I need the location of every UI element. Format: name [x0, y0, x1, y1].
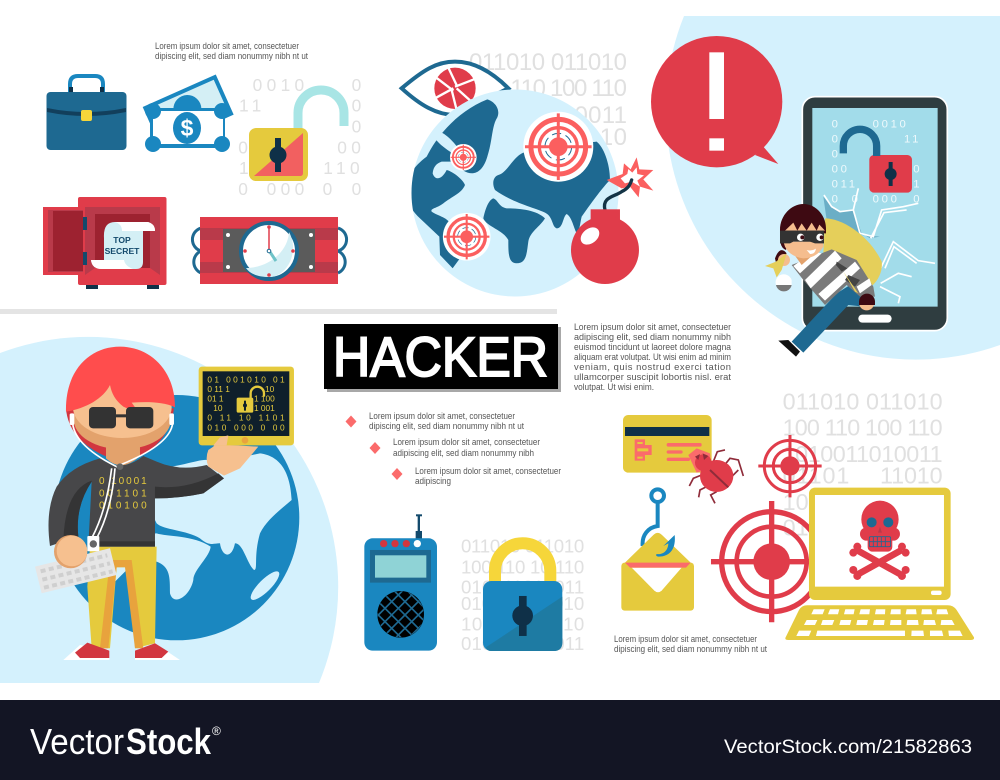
text block: paragraph: volutpat. Ut wisi enim. — [574, 381, 654, 392]
hoodie binary text: 010100 — [99, 500, 147, 511]
binary digits behind blue padlock: 100 110 10 110 — [461, 556, 584, 577]
binary digits behind open padlock: 0 — [352, 96, 366, 116]
text block: paragraph: veniam, quis nostrud exerci tation — [574, 361, 731, 372]
icon: alert speech bubble — [651, 36, 782, 167]
icon: cracked smartphone: 011 — [832, 178, 858, 190]
icon: large target — [523, 112, 593, 182]
icon: cracked smartphone: 0 — [832, 119, 841, 131]
text block: bottom right caption: dipiscing elit, sed diam nonummy nibh nt ut — [614, 643, 767, 654]
footer logo: ® — [212, 724, 221, 738]
binary digits behind open padlock: 0 — [238, 179, 252, 199]
bullet 3: Lorem ipsum dolor sit amet, consectetuer — [415, 465, 561, 476]
bullet 2 — [370, 436, 540, 458]
icon: cracked smartphone: 0 — [913, 163, 922, 175]
icon: large crosshair target — [711, 501, 833, 622]
icon: small crosshair target — [758, 435, 822, 497]
icon: small target — [450, 144, 477, 171]
tablet: 010 000 0 00 — [207, 422, 285, 432]
tablet: 0 11 1 — [207, 384, 230, 394]
binary digits behind open padlock: 1 — [239, 158, 253, 178]
tablet: 0 11 10 1101 — [207, 413, 285, 423]
icon: cracked smartphone — [802, 97, 947, 331]
icon: bug — [688, 448, 743, 503]
hoodie — [48, 456, 224, 547]
icon: cracked smartphone: 0 — [913, 193, 922, 205]
title: HACKER: HACKER — [333, 325, 548, 388]
head — [66, 347, 175, 465]
icon: eye with shutter — [402, 62, 508, 115]
icon: briefcase — [46, 76, 126, 150]
text block: paragraph — [574, 321, 732, 392]
tablet: 10 — [265, 384, 275, 394]
text block: paragraph: ullamcorper suscipit lobortis nisl. erat — [574, 371, 731, 382]
figure: thief with loot bag — [765, 204, 882, 357]
tablet: 1 100 — [254, 394, 275, 404]
icon: cracked smartphone: 00 — [832, 163, 850, 175]
binary digits behind blue padlock: 010011010011 — [461, 633, 584, 654]
hand with keyboard — [54, 535, 87, 568]
footer bar — [0, 700, 1000, 780]
tablet: 01 001010 01 — [207, 375, 285, 385]
icon: cracked smartphone: 0 — [832, 193, 841, 205]
tablet: 01 1 — [207, 394, 224, 404]
icon: laptop with skull — [785, 488, 974, 640]
binary digits top centre: 10010011 — [520, 102, 627, 129]
binary digits top centre: 100 — [570, 147, 610, 174]
tablet — [199, 367, 294, 445]
binary digits bottom right: 01101 — [783, 462, 849, 488]
binary digits bottom right: 100 — [783, 489, 822, 515]
icon: cracked smartphone: 0 — [832, 133, 841, 145]
text block: paragraph: adipiscing elit, sed diam nonummy nibh — [574, 331, 731, 342]
land: americas — [406, 99, 498, 268]
globe — [54, 395, 299, 640]
binary digits behind open padlock: 0 — [352, 116, 366, 136]
music player — [87, 536, 99, 551]
binary digits bottom right: 1010011010011 — [783, 441, 943, 467]
binary digits behind open padlock — [238, 75, 366, 199]
bullet 1 — [346, 410, 524, 431]
binary digits behind open padlock: 0 — [323, 179, 337, 199]
binary digits behind open padlock: 0 — [352, 179, 366, 199]
globe with targets — [406, 90, 618, 296]
icon: open padlock — [249, 90, 344, 181]
bullet 2: adipiscing elit, sed diam nonummy nibh — [393, 447, 534, 458]
binary digits behind blue padlock: 011010 011010 — [461, 535, 584, 556]
binary digits top centre: 011010 011010 — [469, 49, 627, 76]
hoodie binary text: 001101 — [99, 488, 147, 499]
panel: bottom left light blue circle — [0, 337, 338, 683]
binary digits behind blue padlock: 100 110 10 10 — [461, 614, 584, 635]
binary digits behind blue padlock: 010011010011 — [461, 576, 584, 597]
icon: cracked smartphone: 0 — [832, 148, 841, 160]
bullet 2: Lorem ipsum dolor sit amet, consectetuer — [393, 436, 540, 447]
bullet 3 — [392, 465, 561, 486]
bullet 3: adipiscing — [415, 475, 451, 486]
icon: time bomb dynamite — [192, 217, 347, 284]
shoes — [63, 643, 180, 660]
footer image id: VectorStock.com/21582863 — [724, 737, 972, 758]
binary digits top centre: 11010 — [560, 124, 627, 151]
text block: top left caption — [155, 40, 308, 61]
text block: bottom right caption — [614, 633, 767, 654]
footer logo — [30, 721, 221, 762]
icon: hook and envelope phishing — [621, 489, 694, 611]
figure: hacker with globe — [35, 347, 299, 660]
icon: blue padlock — [483, 543, 562, 651]
binary digits behind blue padlock: 010101011010 — [461, 593, 584, 614]
icon: dollar bills — [145, 77, 231, 152]
skull and crossbones — [849, 501, 910, 580]
keyboard — [35, 548, 117, 593]
binary digits bottom right: 011010 011010 — [783, 388, 943, 414]
icon: lower target — [443, 213, 491, 261]
icon: credit card — [623, 415, 712, 473]
binary digits top centre — [469, 49, 627, 174]
binary digits behind blue padlock — [461, 535, 584, 654]
binary digits bottom right: 100 110 100 110 — [783, 414, 943, 440]
binary digits behind open padlock: 0010 — [253, 75, 309, 95]
icon: open safe with top secret scroll: TOP — [113, 235, 131, 245]
bullet 1: dipiscing elit, sed diam nonummy nibh nt ut — [369, 420, 524, 431]
icon: open safe with top secret scroll — [43, 197, 166, 289]
text block: bottom right caption: Lorem ipsum dolor sit amet, consectetuer — [614, 633, 757, 644]
footer logo: Vector — [30, 721, 124, 762]
text block: paragraph: Lorem ipsum dolor sit amet, consectetuer — [574, 321, 731, 332]
bullet list — [346, 410, 561, 486]
binary digits bottom right: 01 — [783, 514, 809, 540]
binary digits bottom right — [783, 388, 943, 540]
icon: bomb — [571, 157, 653, 284]
icon: cracked smartphone: 0010 — [873, 119, 909, 131]
icon: dollar bills: $ — [181, 115, 194, 141]
binary digits behind open padlock: 00 — [337, 137, 365, 157]
text block: top left caption: dipiscing elit, sed diam nonummy nibh nt ut — [155, 50, 308, 61]
icon: cracked smartphone: 1 — [913, 178, 922, 190]
binary digits behind open padlock: 0 — [352, 75, 366, 95]
hoodie binary text: 0 10001 — [99, 476, 147, 487]
binary digits behind open padlock: 110 — [323, 158, 364, 178]
hand with tablet — [207, 436, 258, 476]
earphones — [73, 423, 173, 538]
panel: top right light blue circle — [666, 16, 1000, 360]
icon: walkie talkie radio — [363, 514, 437, 651]
tablet: 10 — [213, 403, 223, 413]
binary digits behind open padlock: 11 — [239, 96, 266, 116]
legs — [87, 547, 157, 648]
hoodie binary text — [99, 476, 147, 511]
icon: open safe with top secret scroll: SECRET — [105, 246, 140, 256]
binary digits bottom right: 11010 — [880, 462, 943, 488]
binary digits behind open padlock: 0 — [238, 137, 252, 157]
tablet: 1 001 — [254, 403, 275, 413]
binary digits top centre: 100 110 100 110 — [469, 75, 627, 102]
text block: paragraph: euismod tincidunt ut laoreet dolore magna — [574, 341, 732, 352]
icon: cracked smartphone: 000 — [873, 193, 900, 205]
binary digits behind open padlock: 000 — [267, 179, 309, 199]
bullet 1: Lorem ipsum dolor sit amet, consectetuer — [369, 410, 515, 421]
icon: cracked smartphone: 11 — [904, 133, 921, 145]
text block: top left caption: Lorem ipsum dolor sit amet, consectetuer — [155, 40, 299, 51]
icon: cracked smartphone: 0 — [852, 193, 861, 205]
footer logo: Stock — [126, 721, 212, 762]
text block: paragraph: aliquam erat volutpat. Ut wisi enim ad minim — [574, 351, 731, 362]
